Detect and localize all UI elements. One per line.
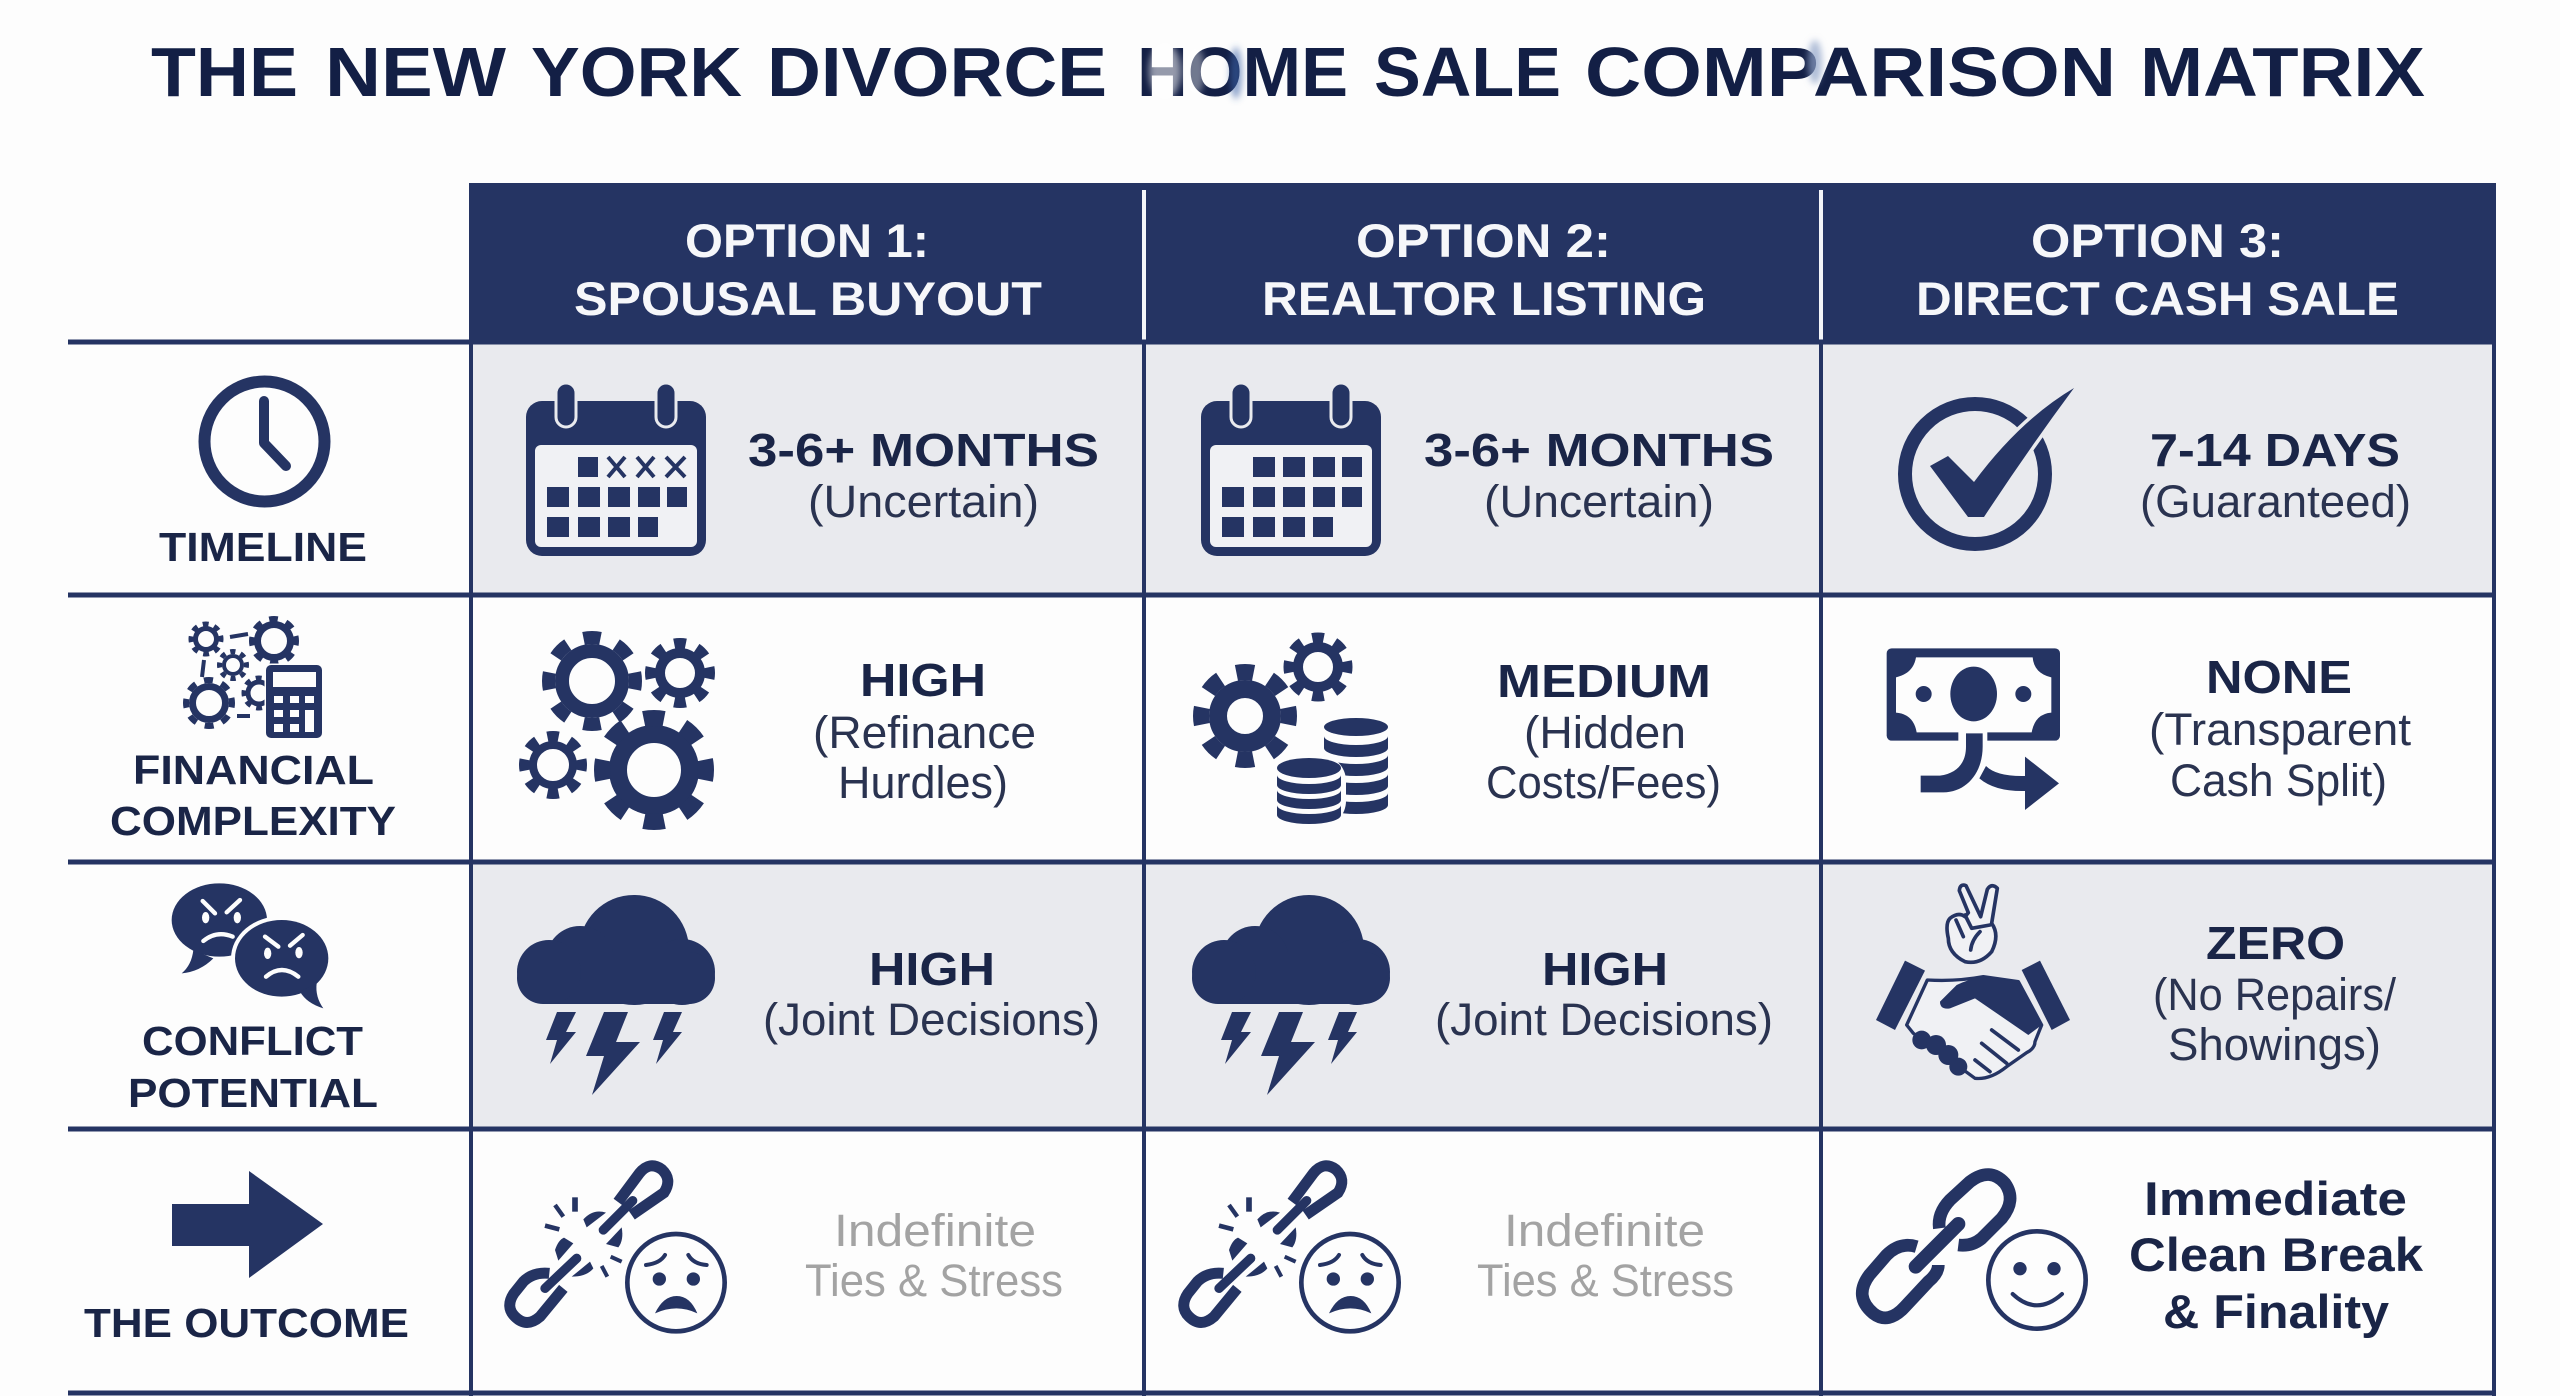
title: HOME [1137, 33, 1348, 111]
cell text: option 3 outcome: Immediate [2144, 1172, 2407, 1225]
column header: option 2 [1262, 214, 1706, 325]
icon: calendar with crossed days [526, 383, 706, 556]
icon: arrow [172, 1171, 323, 1278]
cell text: option 2 timeline [1424, 424, 1774, 527]
cell text: option 3 outcome: & Finality [2163, 1285, 2389, 1338]
cell text: option 3 outcome [2129, 1172, 2424, 1338]
title: DIVORCE [767, 33, 1107, 111]
cell text: option 2 financial complexity: Costs/Fees) [1486, 757, 1721, 808]
cell text: option 1 conflict [763, 943, 1100, 1045]
column header: option 3: DIRECT CASH SALE [1916, 272, 2399, 325]
column header: option 1: OPTION 1: [685, 214, 929, 267]
cell text: option 2 conflict [1435, 943, 1773, 1045]
icon: intact chain with smiling face [1862, 1175, 2086, 1329]
column header: option 2: REALTOR LISTING [1262, 272, 1706, 325]
cell text: option 2 outcome: Ties & Stress [1477, 1255, 1734, 1306]
icon: angry speech bubbles [172, 883, 332, 1008]
cell text: option 2 conflict: HIGH [1542, 943, 1668, 995]
cell text: option 1 timeline [748, 424, 1099, 527]
icon: broken chain with worried face [1184, 1166, 1399, 1331]
icon: handshake with peace sign [1876, 885, 2070, 1079]
cell text: option 3 financial complexity: (Transparent [2149, 704, 2412, 755]
cell text: option 2 financial complexity: (Hidden [1524, 707, 1686, 758]
cell text: option 2 financial complexity: MEDIUM [1497, 655, 1711, 707]
title: THE [151, 33, 298, 111]
cell text: option 1 financial complexity: (Refinance [813, 707, 1036, 758]
row label: financial complexity: COMPLEXITY [110, 798, 396, 844]
title: NEW [325, 33, 506, 111]
icon: gears and calculator [186, 619, 322, 738]
row label: the outcome: THE OUTCOME [84, 1300, 409, 1346]
icon: four gears [524, 638, 710, 822]
row label: financial complexity: FINANCIAL [133, 747, 374, 793]
title: SALE [1374, 33, 1561, 111]
cell text: option 3 outcome: Clean Break [2129, 1228, 2424, 1281]
cell text: option 1 conflict: HIGH [869, 943, 995, 995]
title [151, 33, 2425, 111]
row label: timeline: TIMELINE [159, 524, 367, 570]
cell text: option 3 timeline [2140, 424, 2411, 527]
row label: conflict potential: POTENTIAL [128, 1070, 378, 1116]
column header: option 3 [1916, 214, 2399, 325]
cell text: option 2 outcome: Indefinite [1504, 1205, 1705, 1256]
row label: financial complexity [110, 747, 396, 844]
title: COMPARISON [1585, 33, 2116, 111]
cell text: option 2 conflict: (Joint Decisions) [1435, 994, 1773, 1045]
icon: broken chain with worried face [510, 1166, 725, 1331]
title: MATRIX [2140, 33, 2425, 111]
cell text: option 3 timeline: 7-14 DAYS [2150, 424, 2400, 476]
cell text: option 1 timeline: 3-6+ MONTHS [748, 424, 1099, 476]
column header: option 1: SPOUSAL BUYOUT [574, 272, 1042, 325]
icon: storm cloud with lightning [517, 895, 715, 1095]
icon: calendar [1201, 383, 1381, 556]
cell text: option 1 timeline: (Uncertain) [808, 476, 1039, 527]
column header: option 1 [574, 214, 1042, 325]
title: YORK [531, 33, 742, 111]
cell text: option 1 financial complexity [813, 654, 1036, 808]
cell text: option 2 financial complexity [1486, 655, 1721, 808]
cell text: option 1 conflict: (Joint Decisions) [763, 994, 1100, 1045]
icon: gears and coin stacks [1201, 638, 1388, 827]
cell text: option 2 timeline: (Uncertain) [1484, 476, 1714, 527]
cell text: option 3 conflict: ZERO [2206, 917, 2345, 969]
cell text: option 3 financial complexity [2149, 651, 2412, 806]
cell text: option 3 conflict: Showings) [2168, 1019, 2381, 1070]
cell text: option 3 financial complexity: NONE [2206, 651, 2352, 703]
column header: option 2: OPTION 2: [1356, 214, 1611, 267]
cell text: option 2 outcome [1477, 1205, 1734, 1306]
cell text: option 1 outcome [805, 1205, 1063, 1306]
column header: option 3: OPTION 3: [2031, 214, 2284, 267]
cell text: option 3 timeline: (Guaranteed) [2140, 476, 2411, 527]
cell text: option 3 conflict [2153, 917, 2396, 1070]
icon: clock [204, 382, 324, 502]
cell text: option 3 financial complexity: Cash Split) [2170, 755, 2387, 806]
cell text: option 1 financial complexity: Hurdles) [838, 757, 1008, 808]
icon: storm cloud with lightning [1192, 895, 1390, 1095]
row label: conflict potential: CONFLICT [142, 1018, 363, 1064]
cell text: option 1 financial complexity: HIGH [860, 654, 986, 706]
cell text: option 1 outcome: Indefinite [834, 1205, 1036, 1256]
cell text: option 3 conflict: (No Repairs/ [2153, 969, 2396, 1020]
cell text: option 1 outcome: Ties & Stress [805, 1255, 1063, 1306]
row label: conflict potential [128, 1018, 378, 1116]
icon: check mark in circle [1905, 388, 2074, 544]
icon: banknote with split arrow [1887, 648, 2060, 810]
cell text: option 2 timeline: 3-6+ MONTHS [1424, 424, 1774, 476]
